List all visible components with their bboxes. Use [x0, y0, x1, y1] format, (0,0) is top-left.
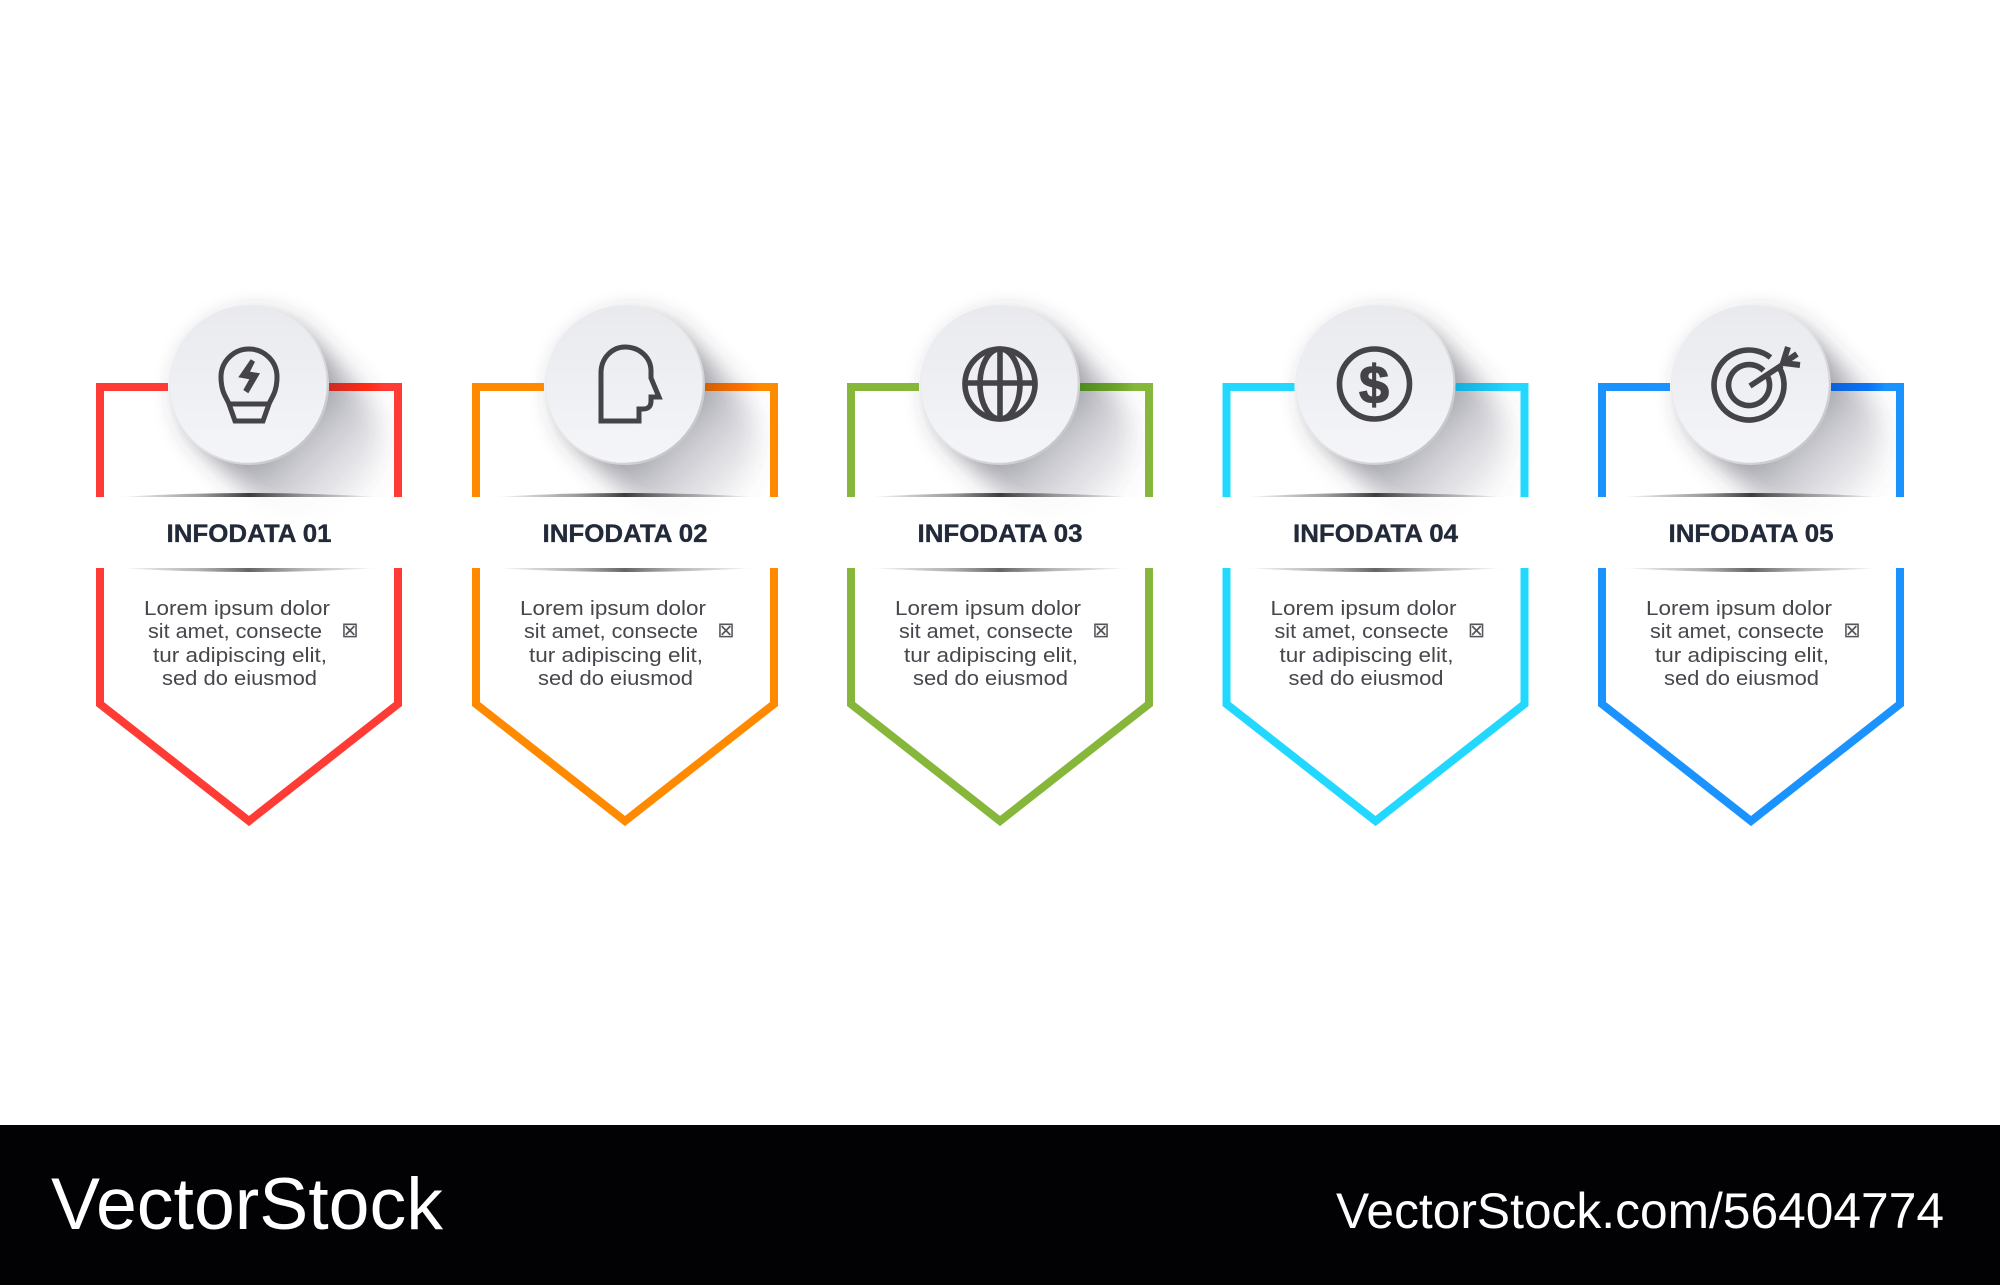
body text: tur adipiscing elit, [153, 644, 327, 667]
body text: Lorem ipsum dolor [1646, 597, 1832, 620]
body text: Lorem ipsum dolor [895, 597, 1081, 620]
body text: ⊠ [1092, 618, 1110, 642]
icon: target with arrow [1714, 347, 1800, 420]
circle badge [545, 305, 705, 465]
body text: ⊠ [1468, 618, 1485, 642]
body text: sed do eiusmod [538, 667, 693, 690]
icon: globe [965, 349, 1035, 419]
body text: sit amet, consecte [1274, 620, 1448, 643]
body text: tur adipiscing elit, [904, 644, 1078, 667]
body text: sed do eiusmod [162, 667, 317, 690]
heading: INFODATA 05 [1668, 520, 1834, 548]
circle badge [1296, 305, 1456, 465]
circle badge [1671, 305, 1831, 465]
icon: light bulb [221, 349, 277, 421]
body text: ⊠ [341, 618, 359, 642]
frame: green shield outline [851, 387, 1149, 821]
body text [895, 597, 1110, 690]
body text [520, 597, 735, 690]
heading: INFODATA 03 [918, 520, 1082, 548]
body text [144, 597, 359, 690]
panel: infodata 01 [96, 305, 402, 821]
VectorStock logo: VectorStock [51, 1164, 443, 1245]
image URL text: VectorStock.com/56404774 [1336, 1183, 1944, 1239]
panel: infodata 05 [1598, 305, 1904, 821]
icon: dollar coin [1340, 349, 1410, 419]
frame: orange shield outline [476, 387, 774, 821]
body text: Lorem ipsum dolor [144, 597, 330, 620]
body text: sed do eiusmod [1664, 667, 1819, 690]
icon: dollar coin: $ [1359, 355, 1389, 415]
circle badge [169, 305, 329, 465]
body text [1646, 597, 1861, 690]
body text: sed do eiusmod [1288, 667, 1444, 690]
frame: red shield outline [100, 387, 398, 821]
frame: blue shield outline [1602, 387, 1900, 821]
icon: human head [601, 347, 659, 421]
body text: sed do eiusmod [913, 667, 1068, 690]
heading: INFODATA 01 [166, 520, 332, 548]
body text: Lorem ipsum dolor [1270, 597, 1457, 620]
panel: infodata 02 [472, 305, 778, 821]
body text: tur adipiscing elit, [1280, 644, 1454, 667]
panel: infodata 04 [1222, 305, 1528, 821]
body text: tur adipiscing elit, [1655, 644, 1829, 667]
body text: ⊠ [1843, 618, 1861, 642]
body text [1270, 597, 1485, 690]
panel: infodata 03 [847, 305, 1153, 821]
body text: ⊠ [717, 618, 735, 642]
frame: cyan shield outline [1226, 387, 1524, 821]
body text: sit amet, consecte [148, 620, 322, 643]
body text: sit amet, consecte [899, 620, 1073, 643]
footer band [0, 1125, 2000, 1285]
body text: tur adipiscing elit, [529, 644, 703, 667]
body text: sit amet, consecte [1650, 620, 1824, 643]
heading: INFODATA 04 [1293, 520, 1458, 548]
body text: Lorem ipsum dolor [520, 597, 706, 620]
heading: INFODATA 02 [542, 520, 708, 548]
circle badge [920, 305, 1080, 465]
body text: sit amet, consecte [524, 620, 698, 643]
